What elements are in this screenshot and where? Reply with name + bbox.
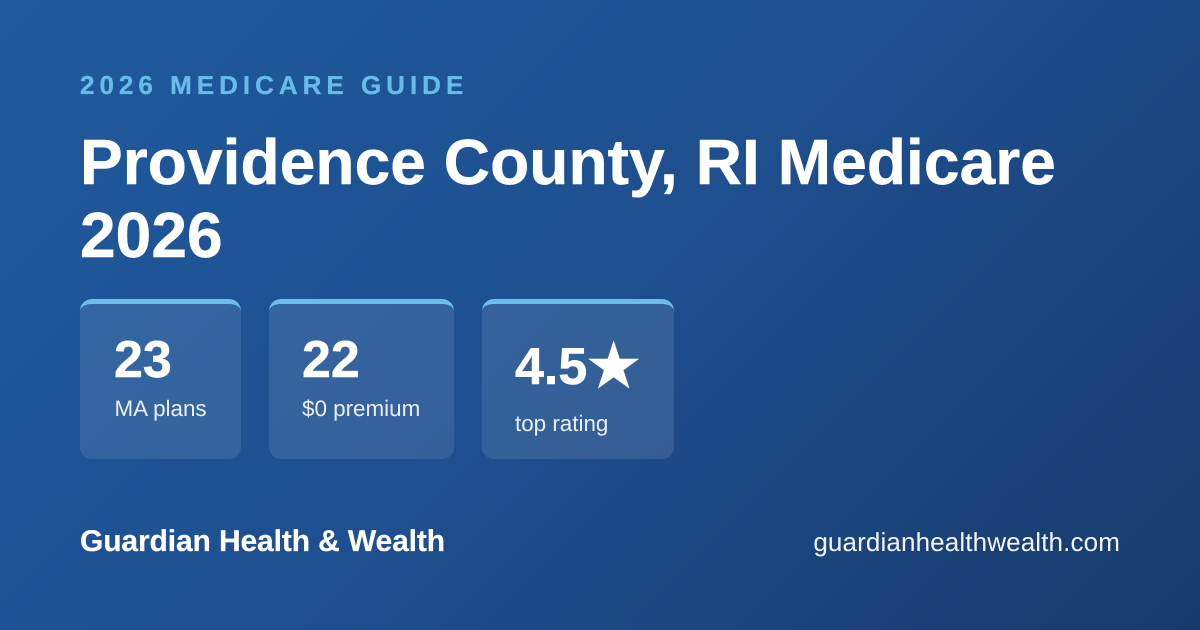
- stat label: top rating: [515, 411, 608, 436]
- stat value: 23: [114, 331, 172, 389]
- stat value with star: 4.5★: [515, 333, 640, 399]
- brand name: Guardian Health & Wealth: [80, 525, 445, 558]
- eyebrow heading: 2026 MEDICARE GUIDE: [80, 70, 468, 100]
- stat label: $0 premium: [302, 396, 420, 421]
- stat card: MA plans: [80, 299, 241, 459]
- title: Providence County, RI Medicare 2026: [80, 126, 1056, 271]
- website url: guardianhealthwealth.com: [813, 527, 1120, 557]
- stat label: MA plans: [114, 396, 207, 421]
- stat card: top rating: [482, 299, 674, 459]
- stat card: $0 premium: [269, 299, 454, 459]
- stat value: 22: [302, 331, 360, 389]
